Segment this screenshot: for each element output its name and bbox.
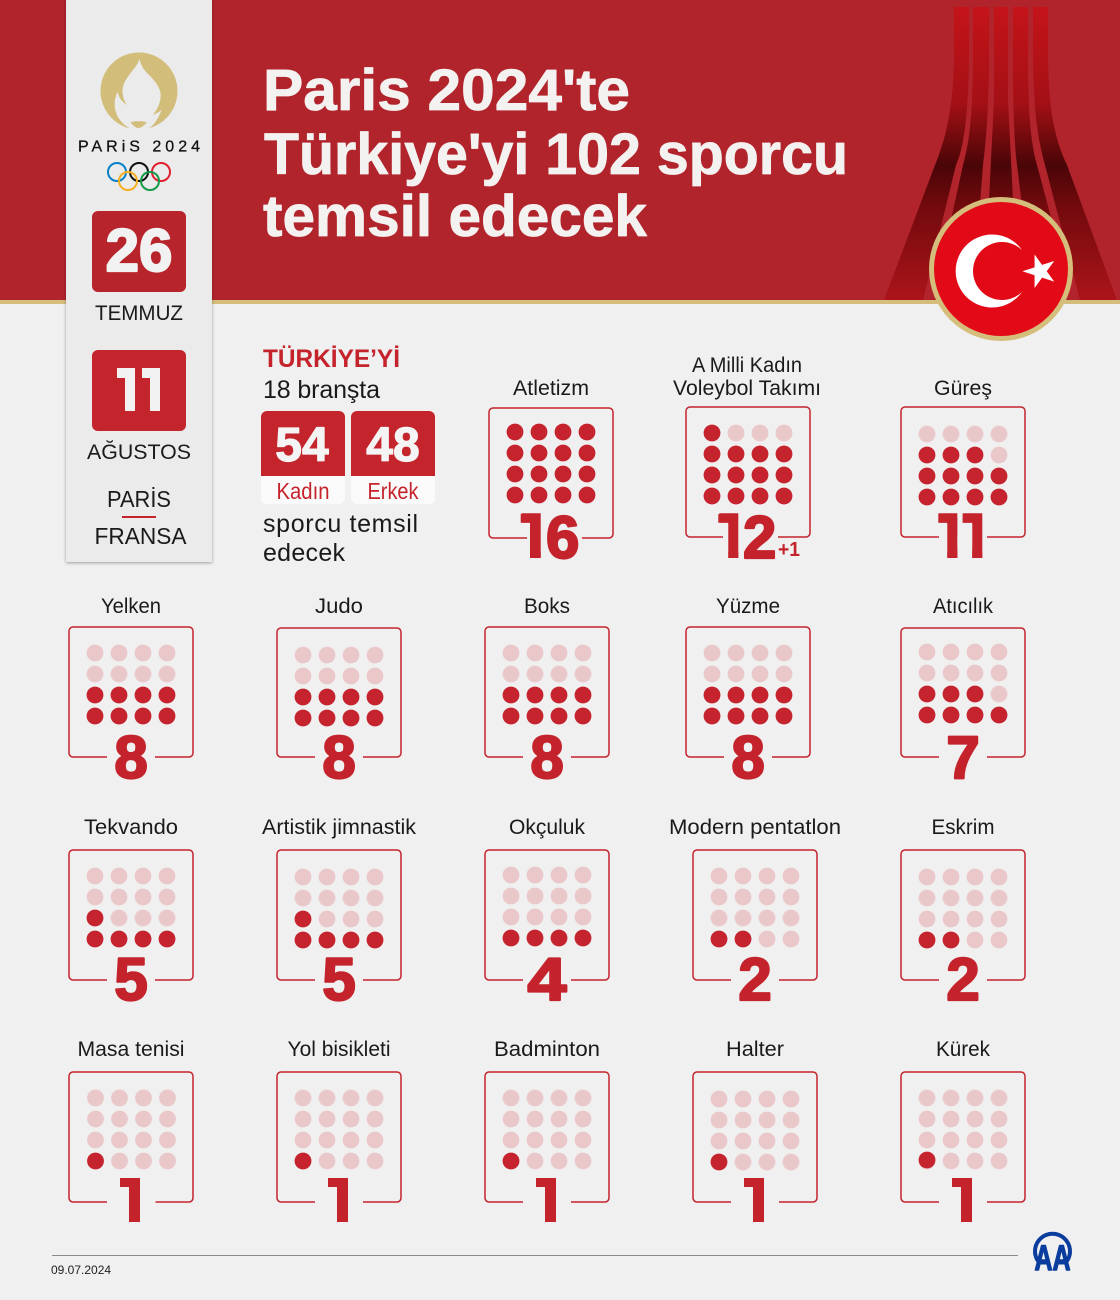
title: temsil edecek	[263, 184, 648, 249]
end date: 1	[112, 357, 145, 424]
card: Eskrim: 2	[946, 946, 980, 1013]
card: Kürek	[901, 1038, 1025, 1235]
card: Kürek: 1	[948, 1168, 982, 1235]
card: Badminton	[485, 1038, 609, 1235]
start date	[92, 211, 186, 325]
card: Atıcılık: 7	[946, 724, 980, 791]
card: Halter: Halter	[726, 1038, 784, 1061]
card: Artistik jimnastik: Artistik jimnastik	[262, 816, 416, 839]
location	[94, 486, 187, 549]
card: Halter: 1	[740, 1168, 774, 1235]
card: Okçuluk	[485, 816, 609, 1013]
flag badge	[929, 197, 1073, 341]
title: Türkiye'yi 102 sporcu	[264, 122, 848, 187]
card: A Milli Kadın Voleybol Takımı: 1	[715, 504, 749, 571]
card: Tekvando: 5	[114, 946, 148, 1013]
icon: AA logo: AA	[1034, 1239, 1070, 1278]
title: Paris 2024'te	[263, 58, 630, 123]
card: Okçuluk: Okçuluk	[509, 816, 585, 839]
card: Eskrim	[901, 816, 1025, 1013]
card: Okçuluk: 4	[528, 946, 567, 1013]
olympic rings	[108, 163, 170, 190]
card: Judo: 8	[322, 724, 356, 791]
men count: 48	[366, 419, 420, 472]
end date	[87, 350, 191, 464]
card: A Milli Kadın Voleybol Takımı: +1	[778, 539, 800, 561]
women count: 54	[275, 419, 329, 472]
heading: TÜRKİYE’Yİ	[263, 344, 400, 373]
card: Halter	[693, 1038, 817, 1235]
card: Tekvando	[69, 816, 193, 1013]
card: Güreş: 1	[959, 504, 993, 571]
card: Yol bisikleti: Yol bisikleti	[288, 1038, 390, 1061]
card: A Milli Kadın Voleybol Takımı: Voleybol Takımı	[673, 377, 821, 400]
header band	[0, 0, 1120, 300]
card: Judo: Judo	[315, 595, 363, 618]
date: 09.07.2024	[51, 1263, 111, 1277]
card: Badminton: Badminton	[494, 1038, 600, 1061]
card: Güreş: Güreş	[934, 377, 992, 400]
card: Yelken	[69, 595, 193, 791]
card: Yelken: 8	[114, 724, 148, 791]
card: Badminton: 1	[532, 1168, 566, 1235]
branch count: 18 branşta	[263, 376, 380, 404]
date panel	[66, 0, 212, 562]
crescent	[956, 235, 1022, 308]
men count	[351, 411, 435, 504]
card: Kürek: Kürek	[936, 1038, 990, 1061]
men count: Erkek	[368, 478, 419, 504]
end date: 1	[137, 357, 170, 424]
card: Artistik jimnastik	[262, 816, 416, 1013]
card: Güreş: 1	[934, 504, 968, 571]
location: PARİS	[107, 486, 171, 512]
end date: AĞUSTOS	[87, 441, 191, 464]
start date: TEMMUZ	[95, 302, 183, 325]
card: Yüzme: 8	[731, 724, 765, 791]
card: Atletizm: 1	[517, 504, 551, 571]
footer rule	[52, 1255, 1018, 1256]
title	[263, 58, 848, 249]
card: Artistik jimnastik: 5	[322, 946, 356, 1013]
star	[1022, 255, 1054, 288]
card: Yol bisikleti: 1	[324, 1168, 358, 1235]
curtain graphic	[884, 7, 1117, 300]
card: Atletizm: 6	[546, 504, 579, 571]
card: Atıcılık	[901, 595, 1025, 791]
icon: AA logo	[1034, 1234, 1070, 1278]
card: Atletizm	[489, 377, 613, 571]
card: Boks: 8	[530, 724, 564, 791]
start date: 26	[106, 217, 172, 284]
card: Modern pentatlon: Modern pentatlon	[669, 816, 841, 839]
women count: Kadın	[276, 478, 330, 504]
card: A Milli Kadın Voleybol Takımı: 2	[743, 504, 776, 571]
card: Tekvando: Tekvando	[84, 816, 178, 839]
closing text: sporcu temsil	[263, 510, 418, 538]
card: Modern pentatlon: 2	[738, 946, 772, 1013]
card: Yelken: Yelken	[101, 595, 161, 618]
card: A Milli Kadın Voleybol Takımı: A Milli Kadın	[692, 354, 802, 377]
card: Yol bisikleti	[277, 1038, 401, 1235]
location: FRANSA	[94, 523, 187, 549]
summary block	[261, 344, 435, 567]
card: Judo	[277, 595, 401, 791]
card: Masa tenisi: 1	[116, 1168, 150, 1235]
Paris 2024 emblem	[78, 52, 200, 190]
card: Boks	[485, 595, 609, 791]
card: Masa tenisi: Masa tenisi	[78, 1038, 184, 1061]
card: Boks: Boks	[524, 595, 570, 618]
card: Yüzme	[686, 595, 810, 791]
card: Modern pentatlon	[669, 816, 841, 1013]
card: Güreş	[901, 377, 1025, 571]
card: A Milli Kadın Voleybol Takımı	[673, 354, 821, 571]
card: Yüzme: Yüzme	[716, 595, 780, 618]
Paris 2024 emblem: PARiS 2024	[78, 138, 200, 156]
women count	[261, 411, 345, 504]
card: Atıcılık: Atıcılık	[933, 595, 993, 618]
card: Masa tenisi	[69, 1038, 193, 1235]
closing text	[263, 510, 418, 567]
card: Atletizm: Atletizm	[513, 377, 589, 400]
card: Eskrim: Eskrim	[932, 816, 994, 839]
closing text: edecek	[263, 539, 346, 567]
